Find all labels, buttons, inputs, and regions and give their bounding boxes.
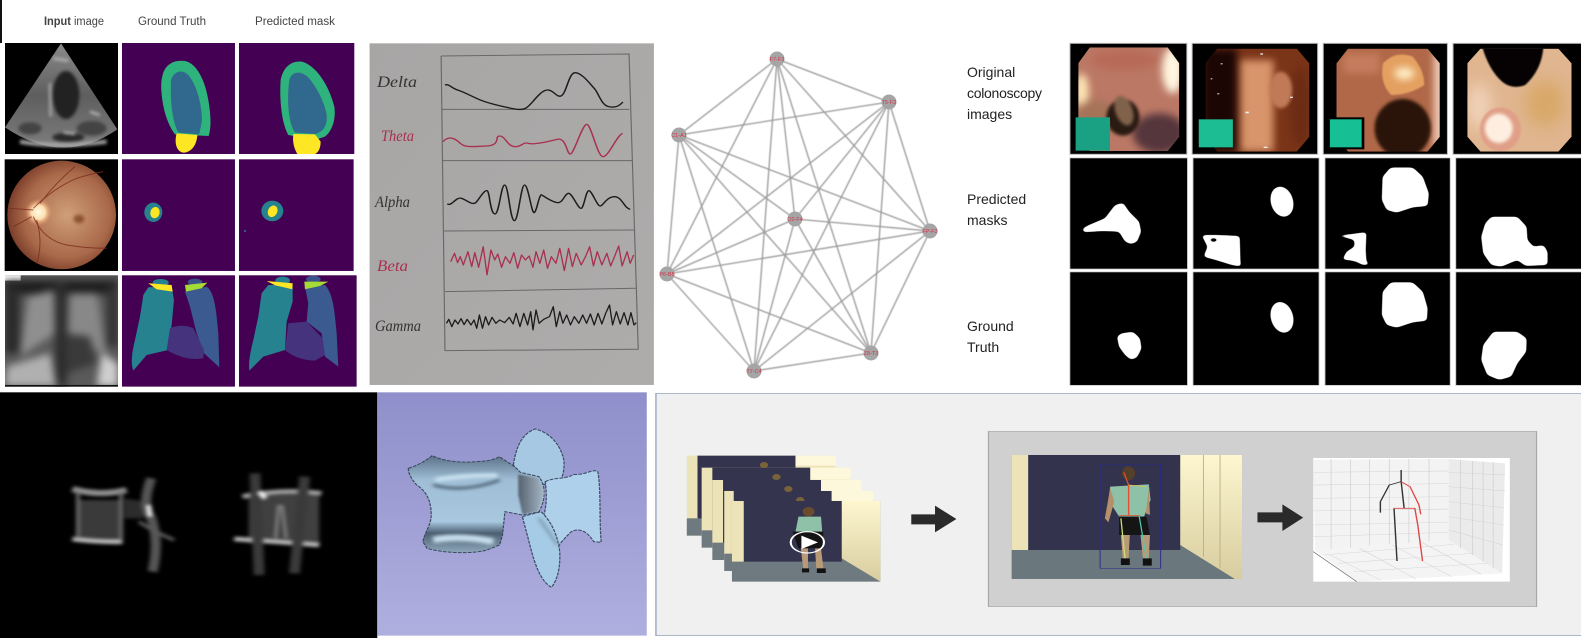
predicted mask: heart [239,43,354,154]
video frame stack [687,456,880,582]
panel: EEG frequency bands [370,43,654,385]
node P6-B5: P6-B5 [659,272,675,278]
node O2-F4: O2-F4 [787,217,803,223]
node F7-F3 [770,52,784,66]
row label: predicted masks: masks [967,212,1007,228]
predicted mask: lungs [239,275,357,387]
right process [544,471,601,547]
label: Gamma: Gamma [375,318,421,335]
node Z8-T3: Z8-T3 [864,351,878,357]
play button [791,532,824,553]
detected pose frame [1012,455,1242,579]
arrow 2 [1257,504,1303,531]
label: Alpha: Alpha [374,194,410,211]
label: Theta: Theta [381,128,414,145]
label: Beta: Beta [377,258,408,275]
alpha wave [447,185,630,221]
row label: original images: Original [967,64,1015,80]
ground truth mask: lungs [122,275,235,387]
node T7-C4 [746,364,762,378]
node O2-F4 [787,212,803,226]
upper wing [513,429,564,485]
lower process [522,512,560,587]
row label: ground truth: Truth [967,339,999,355]
panel: colonoscopy grid [967,43,1581,385]
node C1-A1 [671,128,687,142]
photo 1 [1078,48,1180,151]
node C1-A1: C1-A1 [671,133,687,139]
delta wave [445,73,623,109]
node F7-F3: F7-F3 [770,57,784,63]
front frame [732,501,880,582]
node FP-F3 [922,224,938,238]
node P6-B5 [659,266,675,282]
ground truth mask: heart [122,43,235,154]
heading: Predicted mask: Predicted mask [255,16,335,28]
panel: pose estimation pipeline [656,393,1581,636]
ground truth mask: optic disc [122,159,235,271]
chest x-ray input [5,275,118,387]
beta wave [451,246,634,275]
theta wave [443,124,623,157]
row label: original images: colonoscopy [967,85,1042,101]
gamma wave [446,305,636,330]
photo 3 [1337,49,1444,158]
skeleton overlay [1119,472,1146,558]
panel: segmentation grid [5,16,357,387]
vertebral body [408,456,544,553]
panel: vertebra X-ray projections [0,392,377,638]
photo 4 [1467,47,1572,152]
row label: predicted masks: Predicted [967,191,1026,207]
frontal projection [226,473,321,575]
row label: ground truth: Ground [967,318,1014,334]
photo 2 [1202,49,1310,152]
chart: connectivity graph [659,52,938,378]
gray processing box [988,431,1537,607]
predicted mask: optic disc [239,159,354,271]
paper background and table [370,43,654,385]
node Z8-T3 [864,346,878,360]
arrow 1 [911,506,956,532]
panel: 3D vertebra model [377,392,647,636]
fundus input [5,159,118,271]
predicted masks and ground truth masks [1070,158,1581,385]
3D pose plot [1313,458,1510,582]
node FP-F3: FP-F3 [922,229,938,235]
node T5-F3 [882,94,896,110]
black skeleton side [1380,470,1404,561]
heading: Input image: Input image [44,16,104,28]
lateral projection [73,478,174,572]
node T5-F3: T5-F3 [882,100,896,106]
bounding box [1100,464,1161,568]
row label: original images: images [967,106,1012,122]
label: Delta: Delta [376,74,417,91]
colonoscopy photos [1070,43,1581,158]
pedicle [518,474,544,514]
red skeleton side [1394,482,1423,561]
ultrasound input [5,43,118,154]
heading: Ground Truth: Ground Truth [138,16,206,28]
node T7-C4: T7-C4 [746,369,762,375]
